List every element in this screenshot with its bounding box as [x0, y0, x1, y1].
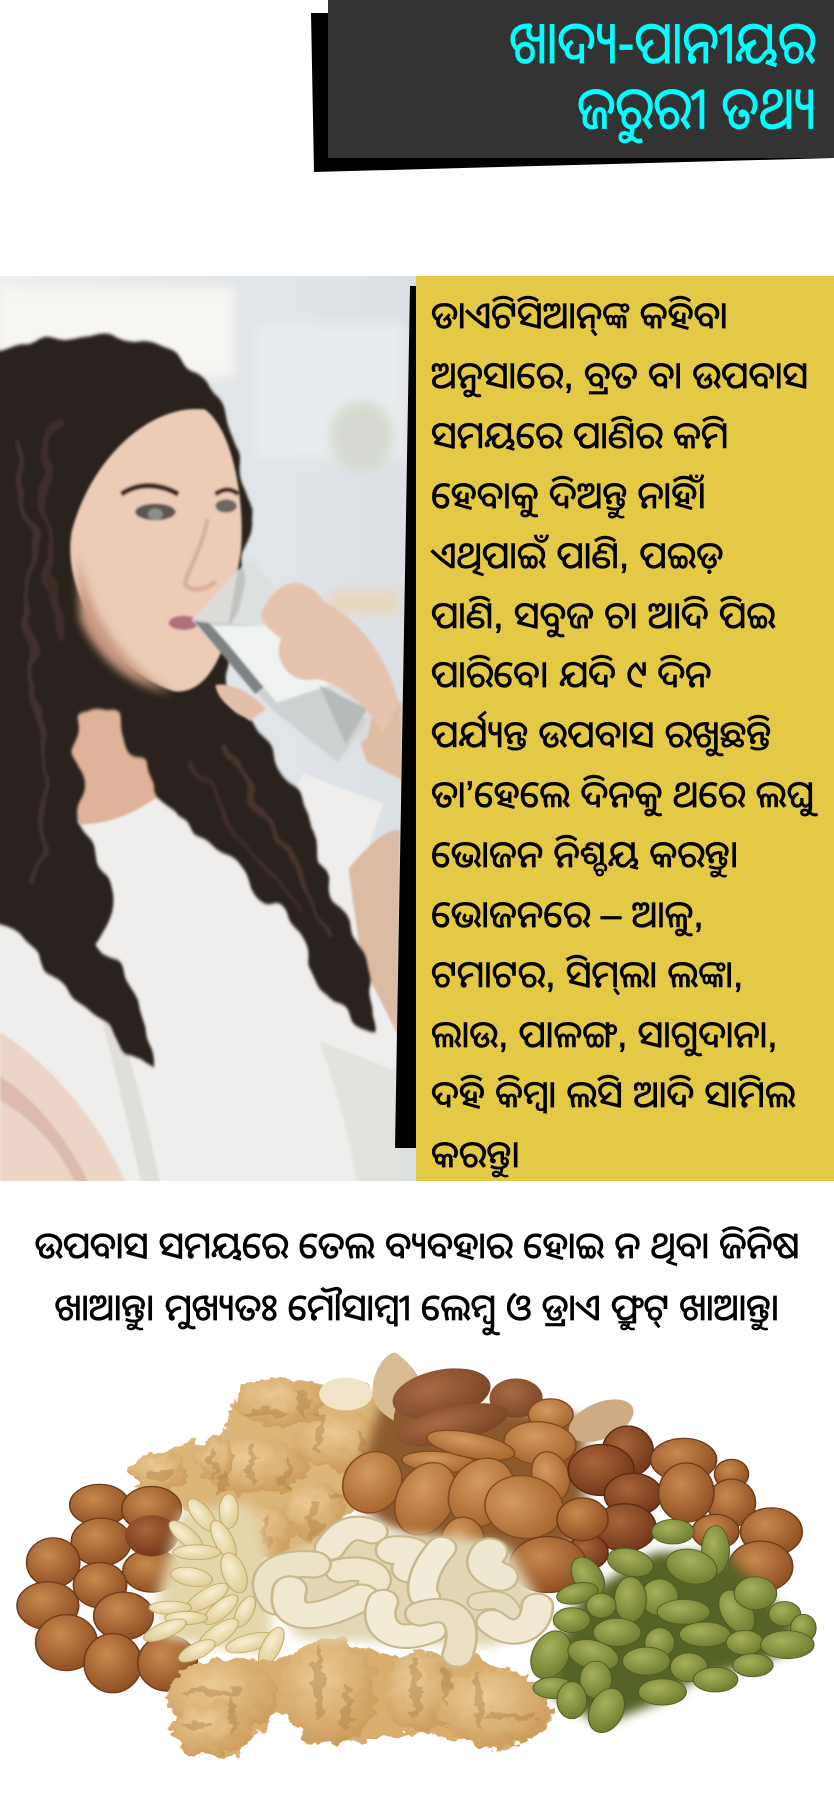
body text: ଏଥିପାଇଁ ପାଣି, ପଇଡ଼ — [431, 535, 723, 576]
photo: pile of mixed nuts — [16, 1352, 817, 1759]
face — [70, 409, 242, 691]
title: ଜରୁରୀ ତଥ୍ୟ — [577, 76, 816, 142]
hand — [261, 583, 399, 733]
body text: ପର୍ଯ୍ୟନ୍ତ ଉପବାସ ରଖୁଛନ୍ତି — [431, 714, 771, 755]
body text: ଦହି କିମ୍ବା ଲସି ଆଦି ସାମିଲ — [431, 1074, 796, 1115]
note text — [35, 1225, 799, 1336]
photo: woman drinking water — [0, 276, 416, 1181]
brows and eyes — [121, 486, 178, 494]
body text: ଟମାଟର, ସିମ୍‌ଲା ଲଙ୍କା, — [431, 954, 743, 995]
hair back — [0, 337, 376, 1068]
body text: ଲାଉ, ପାଳଙ୍ଗ, ସାଗୁଦାନା, — [431, 1014, 778, 1055]
body text: ପାଣି, ସବୁଜ ଚା ଆଦି ପିଇ — [431, 595, 776, 636]
body text: ସମୟରେ ପାଣିର କମି — [431, 415, 728, 456]
header panel — [328, 0, 834, 158]
lips — [169, 616, 198, 630]
body text: ତା’ହେଲେ ଦିନକୁ ଥରେ ଲଘୁ — [431, 774, 814, 815]
face shading — [77, 549, 173, 692]
arm left — [0, 1032, 125, 1181]
note text: ଖାଆନ୍ତୁ। ମୁଖ୍ୟତଃ ମୌସାମ୍ବୀ ଲେମ୍ବୁ ଓ ଡ୍ରାଏ ଫ୍ରୁଟ୍ ଖାଆନ୍ତୁ। — [55, 1287, 779, 1328]
pistachios — [548, 1552, 798, 1725]
nose shadow — [185, 519, 215, 589]
body text: କରନ୍ତୁ। — [431, 1134, 520, 1175]
header shadow — [311, 13, 834, 172]
black divider bar — [395, 286, 416, 1148]
body text: ହେବାକୁ ଦିଅନ୍ତୁ ନାହିଁ। — [431, 475, 706, 516]
hazelnuts left — [17, 1484, 197, 1693]
brazil nuts and almonds — [351, 1400, 585, 1565]
body text: ଅନୁସାରେ, ବ୍ରତ ବା ଉପବାସ — [431, 355, 808, 396]
walnuts upper — [132, 1378, 404, 1560]
cashews — [266, 1528, 543, 1655]
title: ଖାଦ୍ୟ-ପାନୀୟର — [509, 10, 816, 76]
pine nuts — [157, 1503, 271, 1655]
glass — [192, 558, 375, 762]
arm right — [348, 830, 400, 1035]
body text: ଡାଏଟିସିଆନ୍‌ଙ୍କ କହିବା — [431, 295, 728, 336]
white top — [0, 774, 399, 1181]
note text: ଉପବାସ ସମୟରେ ତେଲ ବ୍ୟବହାର ହୋଇ ନ ଥିବା ଜିନିଷ — [35, 1225, 799, 1266]
body text — [430, 295, 818, 1178]
neck — [59, 673, 181, 824]
walnuts bottom — [165, 1639, 553, 1758]
body text: ପାରିବେ। ଯଦି ୯ ଦିନ — [431, 654, 712, 695]
title — [509, 10, 816, 144]
body text: ଭୋଜନରେ – ଆଳୁ, — [431, 894, 704, 935]
body text: ଭୋଜନ ନିଶ୍ଚୟ କରନ୍ତୁ। — [431, 834, 739, 875]
hazelnuts right — [568, 1426, 662, 1569]
yellow text panel — [416, 276, 834, 1181]
